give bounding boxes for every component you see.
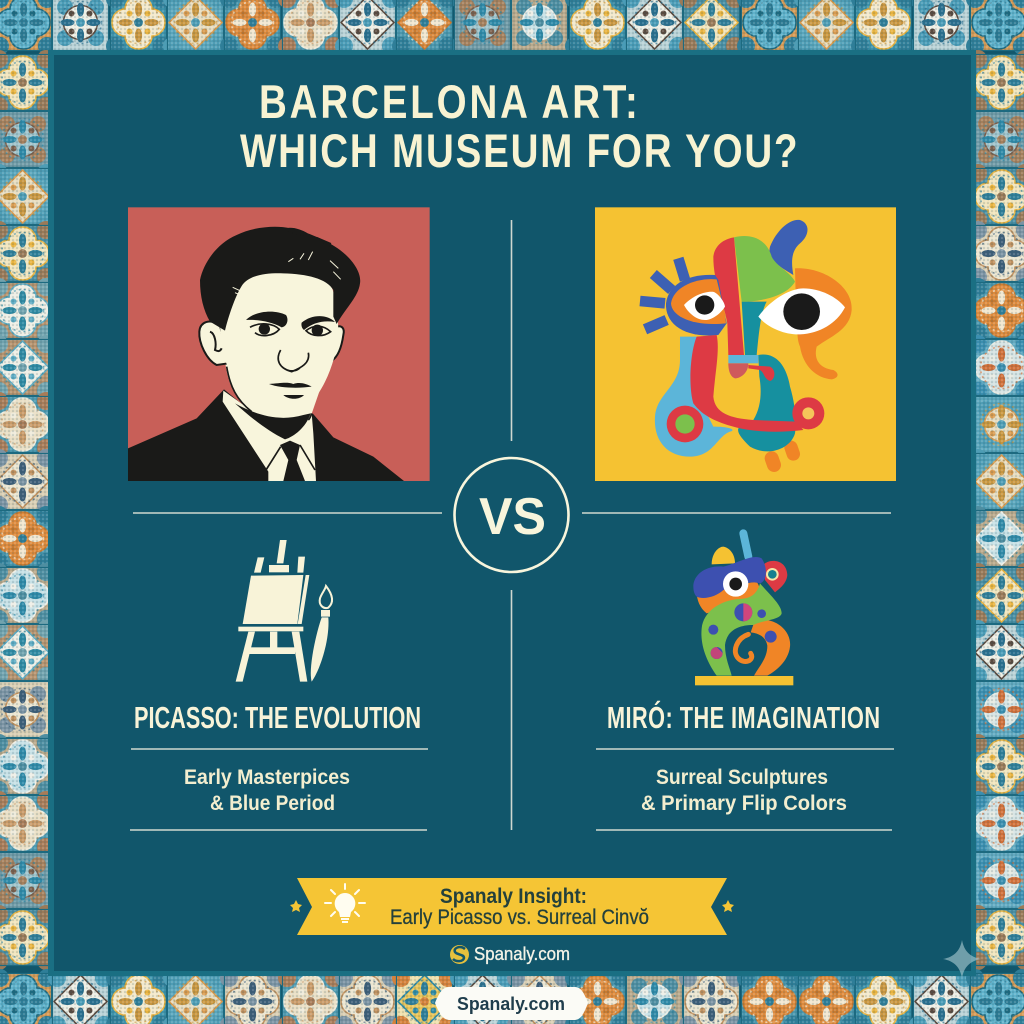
divider lines (130, 220, 894, 830)
icon: Miro sculpture (693, 533, 793, 685)
text block: Picasso highlights (184, 766, 350, 815)
text block: Miro highlights: & Primary Flip Colors (641, 792, 847, 815)
text block: Picasso highlights: & Blue Period (210, 792, 335, 815)
panel: Miro abstract face (595, 207, 896, 481)
pill: Spanaly.com (435, 987, 588, 1020)
title: WHICH MUSEUM FOR YOU? (240, 125, 798, 178)
heading: Picasso: PICASSO: THE EVOLUTION (134, 700, 421, 735)
heading: Miro: MIRÓ: THE IMAGINATION (607, 699, 880, 735)
text block: Picasso highlights: Early Masterpices (184, 766, 350, 789)
VS badge: VS (479, 488, 546, 546)
panel: Picasso portrait (128, 207, 430, 481)
callout: insight ribbon: Spanaly Insight: (440, 885, 587, 908)
callout: insight ribbon: Early Picasso vs. Surreal Cinvŏ (390, 906, 649, 929)
icon: easel and brush (236, 540, 332, 682)
callout: insight ribbon (290, 878, 734, 935)
pill: Spanaly.com: Spanaly.com (457, 994, 565, 1014)
text block: Miro highlights: Surreal Sculptures (656, 766, 828, 789)
logo: Spanaly.com: Spanaly.com (474, 944, 570, 964)
icon: sparkle (943, 940, 981, 978)
VS badge (454, 458, 568, 572)
title: BARCELONA ART: (259, 76, 638, 129)
text block: Miro highlights (641, 766, 847, 815)
title (240, 76, 798, 178)
